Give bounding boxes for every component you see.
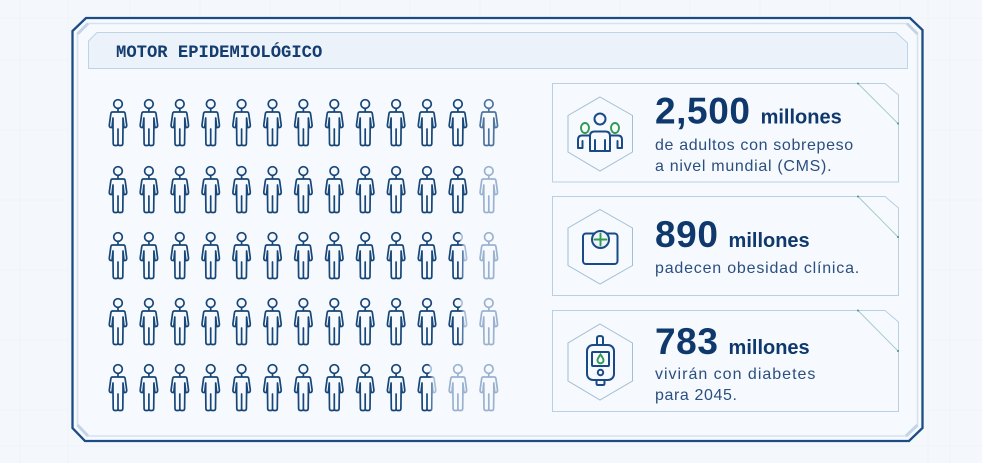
- main panel frame: [72, 18, 922, 441]
- panel: stat card 2,500 millones: [552, 82, 899, 182]
- panel: stat card 783 millones: [552, 310, 899, 412]
- description: padecen obesidad clínica.: [655, 260, 860, 277]
- hexagon badge: [568, 97, 632, 171]
- hexagon badge: [568, 210, 632, 284]
- row 1: [109, 100, 498, 146]
- heading text: MOTOR EPIDEMIOLÓGICO: [116, 43, 322, 63]
- description: a nivel mundial (CMS).: [655, 158, 832, 175]
- value: 2,500 millones: [655, 90, 842, 132]
- row 5: [109, 365, 498, 410]
- heading band: [88, 32, 908, 68]
- description: vivirán con diabetes: [655, 366, 816, 383]
- icon: glucose meter: [587, 336, 614, 385]
- pictogram: grid of 65 people: [109, 100, 498, 410]
- description: para 2045.: [655, 387, 738, 404]
- row 4: [109, 299, 498, 344]
- row 2: [109, 167, 498, 212]
- icon: group of people: [578, 114, 622, 151]
- value: 890 millones: [655, 214, 810, 255]
- description: de adultos con sobrepeso: [655, 137, 854, 154]
- value: 783 millones: [655, 321, 810, 362]
- hexagon badge: [568, 324, 632, 400]
- panel: stat card 890 millones: [552, 196, 899, 296]
- row 3: [109, 233, 498, 278]
- icon: weighing scale: [583, 231, 618, 264]
